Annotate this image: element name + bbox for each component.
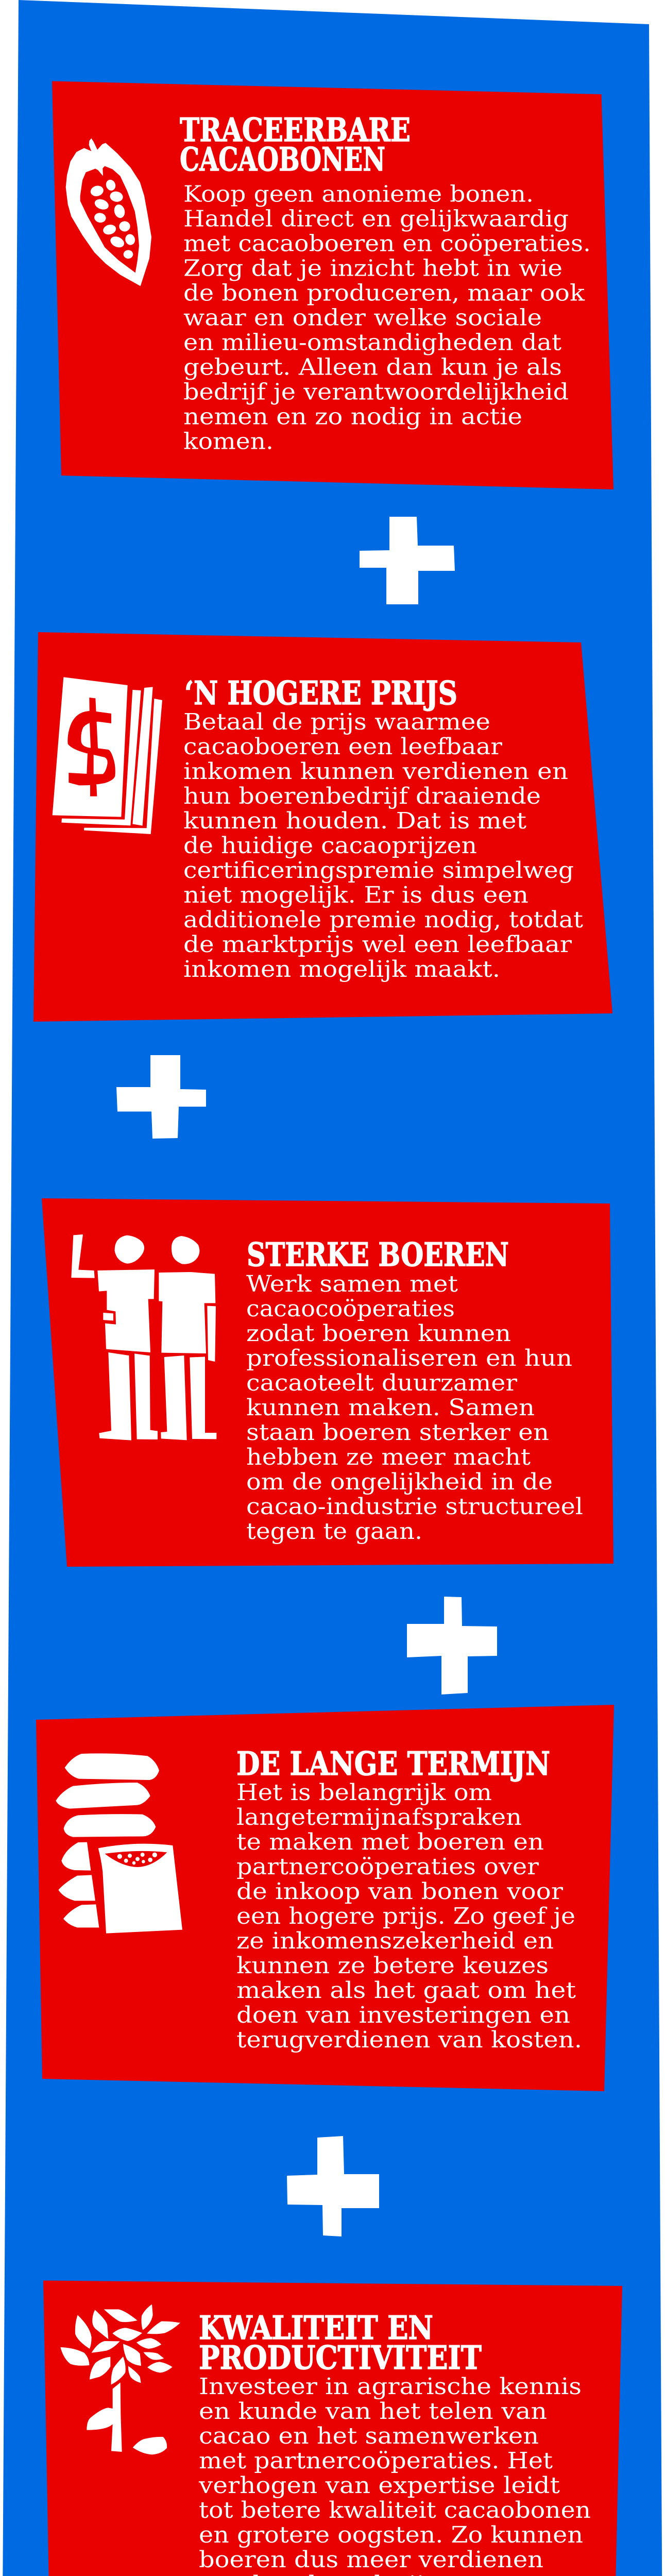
text block: de lange termijn: terugverdienen van kosten. (236, 2027, 582, 2053)
text block: kwaliteit en productiviteit: verhogen van expertise leidt (198, 2472, 560, 2499)
panel: sterke boeren (42, 1198, 613, 1567)
text block: kwaliteit en productiviteit (198, 2374, 591, 2576)
text block: sterke boeren: cacao-industrie structureel (246, 1494, 583, 1520)
text block: hogere prijs: kunnen houden. Dat is met (183, 808, 526, 834)
text block: kwaliteit en productiviteit: Investeer in agrarische kennis (199, 2374, 582, 2400)
icon: banknotes (53, 677, 162, 834)
text block: hogere prijs: inkomen kunnen verdienen en (183, 758, 568, 785)
text block: sterke boeren: professionaliseren en hun (246, 1345, 572, 1371)
text block: de lange termijn: kunnen ze betere keuzes (236, 1953, 549, 1979)
text block: hogere prijs: cacaoboeren een leefbaar (183, 734, 503, 760)
panel: hogere prijs (33, 632, 612, 1022)
text block: de lange termijn: ze inkomenszekerheid en (236, 1928, 554, 1954)
text block: traceerbare cacaobonen: nemen en zo nodig in actie (183, 404, 522, 430)
text block: traceerbare cacaobonen: Handel direct en gelijkwaardig (183, 206, 569, 232)
heading: kwaliteit en productiviteit: PRODUCTIVITEIT (199, 2338, 482, 2377)
heading: de lange termijn: DE LANGE TERMIJN (236, 1744, 550, 1783)
heading: hogere prijs: ‘N HOGERE PRIJS (184, 674, 457, 712)
panel: traceerbare cacaobonen (52, 81, 613, 489)
text block: de lange termijn (236, 1780, 582, 2053)
text block: sterke boeren: zodat boeren kunnen (246, 1320, 511, 1347)
panel: kwaliteit en productiviteit (43, 2280, 622, 2576)
heading: traceerbare cacaobonen: TRACEERBARE (180, 111, 411, 149)
text block: de lange termijn: partnercoöperaties over (236, 1854, 539, 1880)
heading: kwaliteit en productiviteit (199, 2309, 482, 2377)
icon: plus 4 (287, 2136, 379, 2236)
text block: de lange termijn: de inkoop van bonen voor (236, 1878, 564, 1905)
text block: sterke boeren: Werk samen met (246, 1271, 458, 1297)
text block: sterke boeren: om de ongelijkheid in de (246, 1469, 553, 1495)
text block: kwaliteit en productiviteit: boeren dus meer verdienen (199, 2547, 543, 2573)
text block: traceerbare cacaobonen: bedrijf je verantwoordelijkheid (183, 379, 569, 405)
text block: hogere prijs: hun boerenbedrijf draaiende (183, 783, 541, 809)
text block: de lange termijn: langetermijnafspraken (236, 1804, 522, 1831)
heading: traceerbare cacaobonen (180, 111, 411, 178)
icon: plus 1 (360, 517, 455, 604)
text block: traceerbare cacaobonen (183, 181, 591, 454)
panel: de lange termijn (36, 1705, 614, 2091)
text block: hogere prijs: Betaal de prijs waarmee (183, 709, 490, 735)
text block: hogere prijs (183, 709, 583, 982)
icon: plus 3 (407, 1597, 497, 1694)
text block: sterke boeren: cacaoteelt duurzamer (246, 1370, 518, 1396)
icon: cacao pod (66, 138, 151, 286)
text block: de lange termijn: Het is belangrijk om (236, 1780, 492, 1806)
text block: kwaliteit en productiviteit: tot betere kwaliteit cacaobonen (199, 2497, 591, 2523)
text block: hogere prijs: de huidige cacaoprijzen (183, 833, 477, 859)
text block: traceerbare cacaobonen: komen. (183, 429, 274, 454)
heading: sterke boeren: STERKE BOEREN (247, 1235, 509, 1274)
text block: traceerbare cacaobonen: met cacaoboeren en coöperaties. (183, 231, 591, 257)
icon: two farmers (71, 1234, 216, 1440)
text block: traceerbare cacaobonen: Koop geen anonieme bonen. (183, 181, 534, 207)
heading: traceerbare cacaobonen: CACAOBONEN (180, 140, 385, 178)
text block: hogere prijs: certificeringspremie simpelweg (183, 857, 574, 884)
text block: traceerbare cacaobonen: de bonen produceren, maar ook (183, 280, 585, 306)
icon: plus 2 (116, 1055, 206, 1139)
text block: kwaliteit en productiviteit: en kunde van het telen van (199, 2398, 547, 2425)
text block: sterke boeren: tegen te gaan. (246, 1518, 422, 1545)
text block: hogere prijs: inkomen mogelijk maakt. (183, 956, 500, 982)
text block: traceerbare cacaobonen: Zorg dat je inzicht hebt in wie (183, 256, 562, 281)
text block: sterke boeren: hebben ze meer macht (246, 1444, 531, 1470)
text block: de lange termijn: te maken met boeren en (236, 1829, 544, 1855)
text block: kwaliteit en productiviteit: met partnercoöperaties. Het (199, 2448, 553, 2474)
text block: traceerbare cacaobonen: en milieu-omstandigheden dat (183, 330, 561, 355)
text block: sterke boeren: kunnen maken. Samen (246, 1395, 535, 1421)
text block: hogere prijs: de marktprijs wel een leefbaar (183, 931, 572, 958)
text block: de lange termijn: een hogere prijs. Zo geef je (236, 1903, 575, 1929)
text block: sterke boeren: cacaocoöperaties (246, 1296, 455, 1322)
text block: de lange termijn: maken als het gaat om het (236, 1977, 576, 2004)
icon: cacao tree (60, 2304, 180, 2454)
text block: hogere prijs: additionele premie nodig, totdat (183, 907, 583, 933)
text block: traceerbare cacaobonen: gebeurt. Alleen dan kun je als (183, 354, 562, 380)
text block: de lange termijn: doen van investeringen en (236, 2002, 570, 2028)
text block: sterke boeren (246, 1271, 583, 1545)
text block: hogere prijs: niet mogelijk. Er is dus een (183, 882, 528, 908)
text block: sterke boeren: staan boeren sterker en (246, 1419, 549, 1446)
heading: kwaliteit en productiviteit: KWALITEIT EN (199, 2309, 433, 2347)
text block: kwaliteit en productiviteit: cacao en het samenwerken (199, 2423, 539, 2449)
icon: hand with cacao pack (56, 1753, 182, 1934)
text block: traceerbare cacaobonen: waar en onder welke sociale (183, 305, 542, 331)
text block: kwaliteit en productiviteit: en grotere oogsten. Zo kunnen (199, 2522, 583, 2548)
